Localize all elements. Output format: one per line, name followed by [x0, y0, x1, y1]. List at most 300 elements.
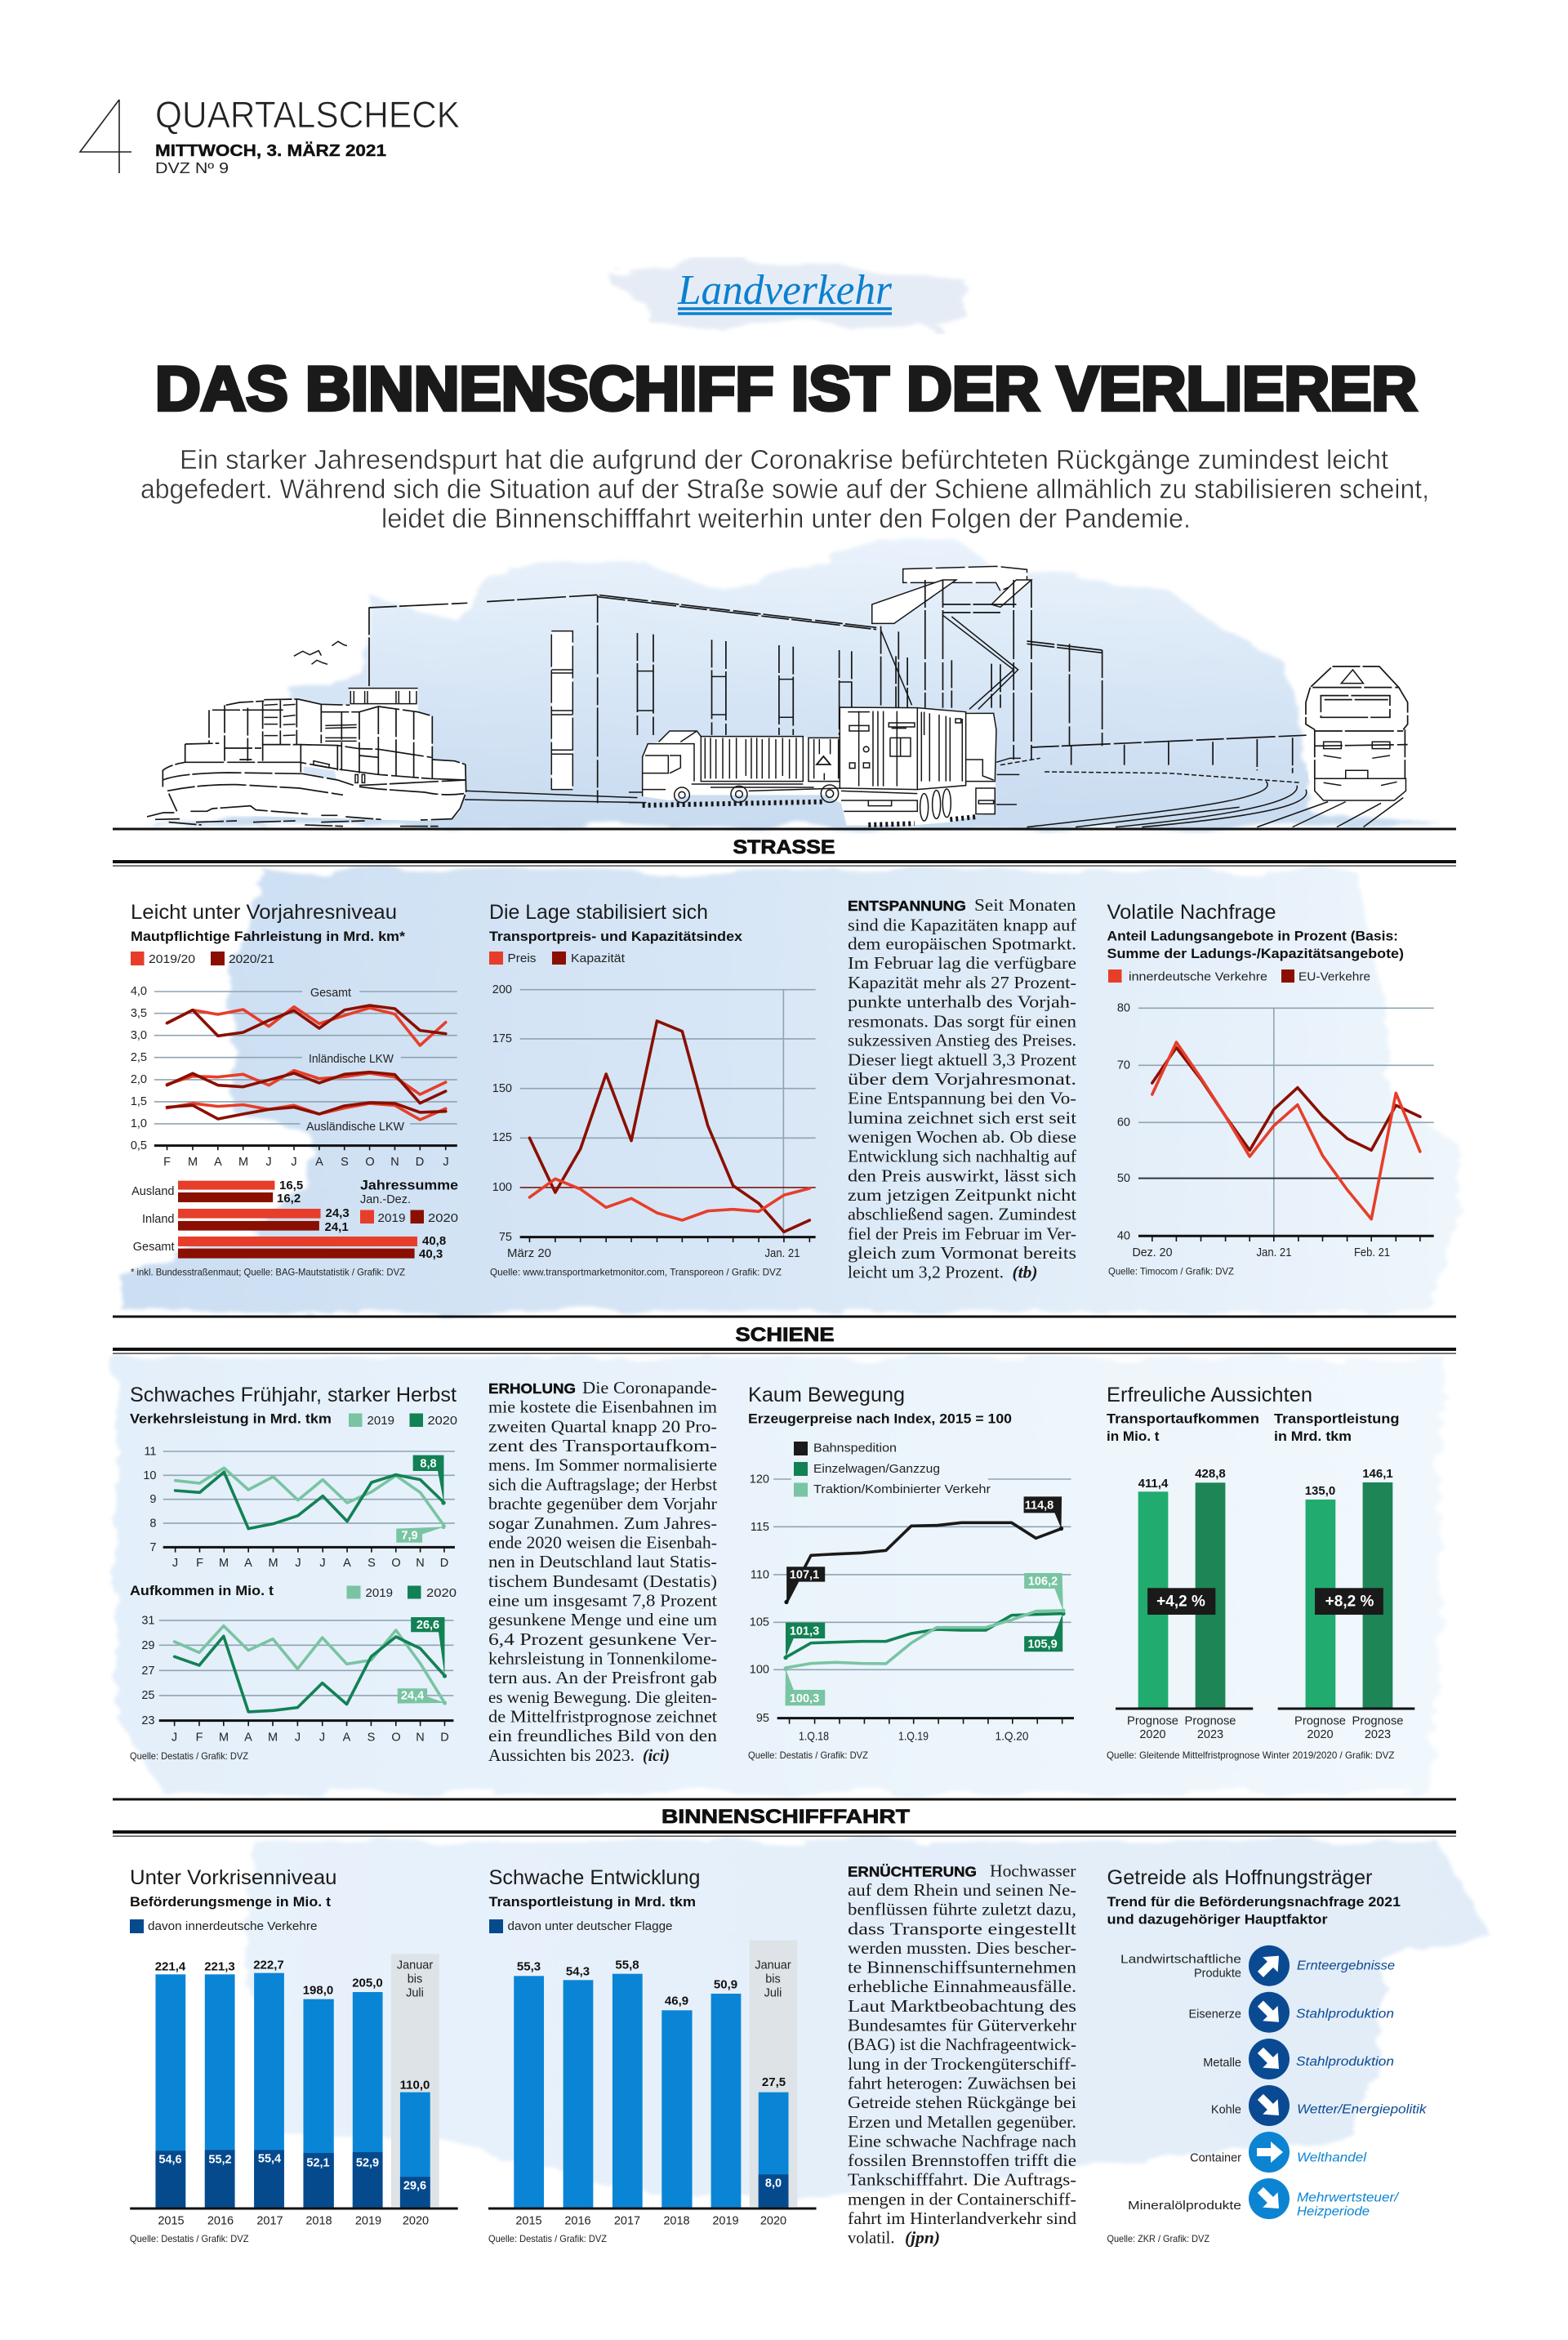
row: Kohle: Kohle [1211, 2104, 1241, 2117]
row: Eisenerze: Stahlproduktion [1296, 2008, 1394, 2021]
text block: Entspannung: Dieser liegt aktuell 3,3 Prozent [848, 1050, 1076, 1069]
subheading: Transportpreis- und Kapazitätsindex [489, 929, 743, 944]
text block: Erholung: ERHOLUNG [488, 1380, 576, 1397]
row: Container: Welthandel [1297, 2151, 1367, 2164]
line chart: truck kilometres: 4,0 [131, 985, 147, 998]
bar chart: tonnage: 2015 [158, 2215, 185, 2228]
line chart: traffic performance: M [219, 1557, 229, 1570]
bar chart: transport volume forecast: 2023 [1197, 1728, 1223, 1741]
subheading: Summe der Ladungs-/Kapazitätsangebote) [1107, 947, 1404, 961]
text block: Erholung: (ici) [643, 1745, 670, 1765]
source: Quelle: Destatis / Grafik: DVZ [488, 2233, 607, 2244]
text block: Entspannung: leicht um 3,2 Prozent. [848, 1263, 1004, 1282]
text block: Ernüchterung: fahrt im Hinterlandverkehr sind [848, 2209, 1077, 2228]
legend [794, 1442, 991, 1496]
bar chart: transport performance forecast: 2023 [1365, 1728, 1391, 1741]
row: Mineralölprodukte: Heizperiode [1297, 2205, 1370, 2218]
text block: Erholung: gesunkene Menge und eine um [488, 1610, 717, 1629]
legend: innerdeutsche Verkehre [1129, 970, 1267, 983]
bar chart: tonnage: 222,7 [253, 1959, 284, 1972]
legend: 2020 [426, 1587, 457, 1600]
subheading: Anteil Ladungsangebote in Prozent (Basis: [1107, 929, 1398, 944]
line chart: freight volume: O [391, 1732, 401, 1745]
line chart: freight volume: 23 [141, 1714, 155, 1727]
row: Container [1190, 2132, 1367, 2173]
legend [1108, 969, 1370, 983]
line chart: traffic performance: 7,9 [401, 1529, 418, 1542]
bar chart: transport performance: 46,9 [665, 1995, 688, 2008]
text block: Entspannung: dem europäischen Spotmarkt. [848, 934, 1076, 954]
text block: Entspannung: Im Februar lag die verfügbare [848, 953, 1076, 973]
line chart: traffic performance: J [319, 1557, 326, 1570]
bar chart: transport performance: 2019 [712, 2215, 739, 2228]
watercolor: road panel backdrop [118, 871, 1462, 1312]
legend: Preis [508, 952, 536, 965]
line chart: producer prices: 110 [751, 1568, 769, 1581]
birds [294, 641, 347, 664]
line chart: producer prices: 100,3 [790, 1692, 819, 1705]
line chart: share of load offers: 80 [1117, 1001, 1130, 1014]
line chart: freight volume: J [172, 1732, 177, 1745]
intro text [140, 444, 1429, 533]
subheading: Beförderungsmenge in Mio. t [130, 1895, 332, 1910]
line chart: traffic performance: N [416, 1557, 425, 1570]
date: MITTWOCH, 3. MÄRZ 2021 [155, 141, 386, 160]
text block: Erholung: kehrsleistung in Tonnenkilome- [488, 1648, 717, 1668]
section rules and heading: Binnenschifffahrt: BINNENSCHIFFFAHRT [662, 1806, 910, 1828]
heading: Die Lage stabilisiert sich [489, 901, 708, 924]
line chart: traffic performance: 9 [149, 1493, 157, 1506]
text block: Ernüchterung: erhebliche Einnahmeausfälle. [848, 1977, 1076, 1996]
masthead [80, 94, 460, 176]
line chart: producer prices: 101,3 [790, 1625, 819, 1638]
heading: Kaum Bewegung [748, 1384, 905, 1406]
row: Metalle: Metalle [1203, 2057, 1241, 2070]
text block: Erholung: ende 2020 weisen die Eisenbah- [488, 1532, 717, 1552]
source: Quelle: ZKR / Grafik: DVZ [1107, 2233, 1209, 2244]
bar chart: transport volume forecast: 428,8 [1195, 1467, 1226, 1481]
text block: Ernüchterung: auf dem Rhein und seinen Ne- [848, 1880, 1076, 1900]
line chart: freight volume: F [196, 1732, 203, 1745]
legend: 2019/20 [149, 953, 195, 966]
text block: Erholung: tern aus. An der Preisfront gab [488, 1668, 717, 1687]
line chart: truck kilometres: N [390, 1156, 399, 1169]
line chart: truck kilometres: Inländische LKW [309, 1053, 394, 1066]
panel: Kaum Bewegung [748, 1384, 1074, 1761]
line chart: producer prices: 1.Q.18 [799, 1730, 829, 1743]
legend: 2020/21 [229, 953, 274, 966]
line chart: share of load offers: Jan. 21 [1256, 1246, 1292, 1259]
text block: Ernüchterung: fossilen Brennstoffen trifft die [848, 2151, 1076, 2170]
bar chart: tonnage: 2016 [207, 2215, 234, 2228]
heading: Schwache Entwicklung [488, 1866, 701, 1889]
text block: Entspannung: gleich zum Vormonat bereits [848, 1243, 1076, 1263]
locomotive [1306, 666, 1408, 800]
text block: Erholung: sich die Auftragslage; der Herbst [488, 1474, 717, 1494]
bar chart: annual totals: 40,8 [422, 1234, 446, 1248]
legend: EU-Verkehre [1298, 970, 1370, 983]
subheading: Aufkommen in Mio. t [130, 1584, 274, 1598]
underline [678, 309, 892, 314]
bar chart: transport volume forecast: Prognose [1127, 1715, 1178, 1728]
legend: 2019 [368, 1415, 394, 1428]
text block: Ernüchterung: (jpn) [905, 2228, 940, 2248]
bar chart: tonnage: 205,0 [352, 1977, 383, 1990]
line chart: freight volume: A [244, 1732, 252, 1745]
line chart: share of load offers: Dez. 20 [1132, 1246, 1173, 1259]
line chart: price and capacity index: Jan. 21 [764, 1247, 800, 1260]
section rules and heading: Strasse: STRASSE [733, 836, 835, 858]
line chart: producer prices: 100 [750, 1663, 769, 1676]
text block: Erholung: 6,4 Prozent gesunkene Ver- [488, 1629, 717, 1649]
legend: davon unter deutscher Flagge [508, 1920, 673, 1933]
row: Mineralölprodukte: Mineralölprodukte [1128, 2200, 1241, 2213]
text block: Entspannung: sukzessiven Anstieg des Preises. [848, 1031, 1076, 1050]
panel: Die Lage stabilisiert sich [489, 901, 816, 1277]
legend: davon innerdeutsche Verkehre [148, 1920, 317, 1933]
heading: Erfreuliche Aussichten [1107, 1384, 1312, 1406]
line chart: producer prices: 1.Q.20 [995, 1730, 1029, 1743]
section rules and heading: Binnenschifffahrt [113, 1798, 1456, 1837]
subheading: Verkehrsleistung in Mrd. tkm [130, 1411, 332, 1426]
line chart: producer prices: 114,8 [1025, 1500, 1054, 1513]
text block: Erholung: sogar Zunahmen. Zum Jahres- [488, 1513, 717, 1533]
line chart: producer prices: 95 [756, 1712, 769, 1725]
text block: Entspannung: Kapazität mehr als 27 Prozent- [848, 973, 1076, 992]
line chart: truck kilometres: J [443, 1156, 449, 1169]
line chart: freight volume: D [440, 1732, 449, 1745]
line chart: freight volume: S [368, 1732, 375, 1745]
line chart: freight volume: M [268, 1732, 278, 1745]
bar chart: tonnage: 52,1 [306, 2156, 330, 2169]
text block: Ernüchterung: ERNÜCHTERUNG [848, 1863, 977, 1879]
title: DAS BINNENSCHIFF IST DER VERLIERER [155, 354, 1417, 424]
line chart: traffic performance: J [295, 1557, 301, 1570]
bar chart: annual totals: 40,3 [419, 1247, 443, 1261]
line chart: truck kilometres: M [238, 1156, 248, 1169]
line chart: price and capacity index: März 20 [507, 1247, 551, 1260]
intro text: Ein starker Jahresendspurt hat die aufgrund der Coronakrise befürchteten Rückgänge zumindest leicht [180, 444, 1388, 475]
line chart: price and capacity index: 125 [492, 1131, 512, 1144]
text block: Erholung: tischem Bundesamt (Destatis) [488, 1571, 717, 1591]
kicker Landverkehr: Landverkehr [677, 267, 893, 314]
text block: Erholung: zweiten Quartal knapp 20 Pro- [488, 1416, 717, 1436]
bar chart: annual totals: 2019 [377, 1212, 405, 1225]
line chart: traffic performance: S [368, 1557, 376, 1570]
line chart: share of load offers: 70 [1117, 1059, 1130, 1072]
bar chart: transport volume forecast: 411,4 [1138, 1477, 1169, 1491]
text block: Entspannung: Entwicklung sich nachhaltig auf [848, 1147, 1076, 1166]
text block: Erholung: zent des Transportaufkom- [488, 1436, 717, 1455]
line chart: price and capacity index: 75 [499, 1231, 512, 1244]
brush stroke [608, 261, 968, 331]
line chart: price and capacity index [492, 983, 816, 1260]
text block: Ernüchterung: mengen in der Containerschiff- [848, 2189, 1076, 2209]
text block: Erholung: brachte gegenüber dem Vorjahr [488, 1494, 717, 1513]
text block: Ernüchterung: Eine schwache Nachfrage nach [848, 2131, 1077, 2151]
line chart: traffic performance: 8 [149, 1518, 157, 1531]
source: * inkl. Bundesstraßenmaut; Quelle: BAG-Mautstatistik / Grafik: DVZ [131, 1266, 405, 1277]
line chart: share of load offers: 60 [1117, 1116, 1130, 1129]
text block: Entspannung: ENTSPANNUNG [848, 898, 966, 914]
illustration: port with ship, truck and train [147, 566, 1408, 827]
text block: Ernüchterung: te Binnenschiffsunternehmen [848, 1958, 1077, 1977]
text block: Erholung: nen in Deutschland laut Statis- [488, 1552, 717, 1571]
line chart: traffic performance [143, 1446, 455, 1570]
legend: Traktion/Kombinierter Verkehr [813, 1483, 991, 1496]
bar chart: tonnage: 55,2 [208, 2153, 232, 2166]
text block: Entspannung: sind die Kapazitäten knapp auf [848, 915, 1076, 934]
subheading [1107, 929, 1404, 961]
watercolor: illustration backdrop [141, 539, 1452, 827]
bar chart: transport performance forecast: +8,2 % [1325, 1593, 1374, 1611]
line chart: producer prices: 115 [751, 1521, 769, 1534]
panel: Unter Vorkrisenniveau [130, 1866, 458, 2244]
line chart: freight volume: M [219, 1732, 229, 1745]
text block: Ernüchterung: dass Transporte eingestellt [848, 1919, 1076, 1938]
line chart: freight volume: 27 [141, 1665, 155, 1678]
bar chart: transport performance: 2015 [515, 2215, 542, 2228]
row: Landwirtschaftliche Produkte: Ernteergebnisse [1297, 1959, 1395, 1973]
legend: Einzelwagen/Ganzzug [813, 1463, 940, 1476]
subheading: und dazugehöriger Hauptfaktor [1107, 1913, 1328, 1928]
row: Eisenerze [1189, 1992, 1394, 2033]
text block: Entspannung: Seit Monaten [974, 895, 1076, 915]
bar chart: transport performance: 2016 [564, 2215, 591, 2228]
line chart: traffic performance: O [391, 1557, 401, 1570]
bar chart: annual totals: 24,3 [325, 1206, 350, 1220]
bar chart: transport performance: 8,0 [765, 2177, 782, 2191]
section name: QUARTALSCHECK [155, 94, 460, 136]
line chart: traffic performance: F [196, 1557, 203, 1570]
heading: Getreide als Hoffnungsträger [1107, 1866, 1372, 1889]
row: Mineralölprodukte [1128, 2178, 1400, 2219]
section rules and heading: Schiene [113, 1315, 1456, 1354]
watercolor: inland waterway panel backdrop [245, 1841, 1490, 2197]
bar chart: tonnage: 55,4 [258, 2153, 281, 2166]
subheading: Transportleistung in Mrd. tkm [488, 1895, 696, 1910]
line chart: freight volume: 24,4 [401, 1689, 424, 1702]
bar chart: transport performance: 50,9 [714, 1978, 737, 1991]
legend: Bahnspedition [813, 1442, 897, 1455]
watercolor: rail panel backdrop [116, 1357, 1446, 1794]
panel: Leicht unter Vorjahresniveau [131, 901, 458, 1277]
text block: Erholung [488, 1378, 718, 1765]
text block: Erholung: ein freundliches Bild von den [488, 1726, 718, 1745]
line chart: freight volume: J [295, 1732, 301, 1745]
bar chart: annual totals [131, 1178, 458, 1261]
row: Container: Container [1190, 2151, 1241, 2164]
line chart: price and capacity index: 200 [492, 983, 512, 996]
line chart: share of load offers: 50 [1117, 1172, 1130, 1185]
bar chart: transport performance: Januar [755, 1959, 791, 1972]
line chart: share of load offers [1117, 1001, 1434, 1259]
heading: Schwaches Frühjahr, starker Herbst [130, 1384, 457, 1406]
line chart: freight volume: 29 [141, 1639, 155, 1652]
line chart: producer prices: 105,9 [1027, 1638, 1058, 1651]
line chart: freight volume: 31 [141, 1614, 155, 1627]
legend: 2020 [428, 1415, 457, 1428]
subheading: Trend für die Beförderungsnachfrage 2021 [1107, 1895, 1401, 1910]
line chart: truck kilometres: S [341, 1156, 349, 1169]
line chart: producer prices: 106,2 [1028, 1575, 1058, 1588]
bar chart: tonnage: 2019 [355, 2215, 381, 2228]
line chart: traffic performance: 11 [144, 1446, 157, 1459]
line chart: producer prices [750, 1473, 1074, 1743]
line chart: share of load offers: Feb. 21 [1354, 1246, 1390, 1259]
bar chart: transport performance forecast: 146,1 [1362, 1467, 1393, 1481]
line chart: freight volume: 26,6 [416, 1619, 439, 1632]
text block: Ernüchterung: volatil. [848, 2228, 895, 2248]
line chart: traffic performance: J [172, 1557, 178, 1570]
source: Quelle: Destatis / Grafik: DVZ [748, 1749, 868, 1761]
line chart: producer prices: 107,1 [790, 1568, 819, 1581]
text block: Entspannung [848, 895, 1077, 1282]
line chart: price and capacity index: 175 [492, 1032, 512, 1045]
text block: Entspannung: wenigen Wochen ab. Ob diese [848, 1127, 1076, 1147]
row: Landwirtschaftliche Produkte: Landwirtschaftliche [1120, 1954, 1241, 1967]
line chart: price and capacity index: 150 [492, 1082, 512, 1095]
text block: Ernüchterung: lung in der Trockengüterschiff- [848, 2054, 1076, 2074]
panel: Erfreuliche Aussichten [1107, 1384, 1414, 1761]
bar chart: tonnage: 221,4 [155, 1960, 186, 1973]
line chart: truck kilometres: 1,5 [131, 1095, 147, 1108]
text block: Ernüchterung: fahrt heterogen: Zuwächsen bei [848, 2073, 1076, 2093]
legend [349, 1413, 457, 1428]
bar chart: annual totals: Gesamt [133, 1241, 175, 1254]
line chart: truck kilometres: 2,0 [131, 1073, 147, 1086]
line chart: freight volume: A [343, 1732, 351, 1745]
line chart: producer prices: 1.Q.19 [898, 1730, 929, 1743]
legend: 2019 [366, 1587, 393, 1600]
line chart: truck kilometres [131, 985, 457, 1169]
line chart: freight volume: 25 [141, 1689, 155, 1702]
bar chart: transport performance: 55,8 [615, 1959, 639, 1972]
line chart: traffic performance: 8,8 [420, 1457, 437, 1470]
text block: Entspannung: lumina zeichnet sich erst seit [848, 1108, 1076, 1127]
subheading right: Transportleistung [1274, 1411, 1400, 1426]
legend [489, 952, 625, 965]
row: Eisenerze: Eisenerze [1189, 2008, 1241, 2021]
line chart: truck kilometres: J [291, 1156, 297, 1169]
line chart: truck kilometres: J [265, 1156, 272, 1169]
warehouse and crane [294, 566, 1403, 827]
text block: Ernüchterung: Getreide stehen Rückgänge bei [848, 2093, 1076, 2112]
subheading [1107, 1895, 1401, 1928]
row: Landwirtschaftliche Produkte: Produkte [1194, 1967, 1241, 1980]
row: Mineralölprodukte: Mehrwertsteuer/ [1297, 2191, 1400, 2205]
line chart: truck kilometres: 1,0 [131, 1117, 147, 1130]
intro text: abgefedert. Während sich die Situation auf der Straße sowie auf der Schiene allmählich zu stabilisieren scheint, [140, 474, 1429, 504]
section rules and heading: Schiene: SCHIENE [735, 1324, 835, 1346]
bar chart: transport performance [488, 1941, 816, 2228]
source: Quelle: Destatis / Grafik: DVZ [130, 2233, 248, 2244]
bar chart: transport volume forecast [1116, 1467, 1253, 1741]
legend [346, 1586, 457, 1600]
line chart: freight volume: N [416, 1732, 425, 1745]
bar chart: transport performance: 2017 [614, 2215, 640, 2228]
subheading: Mautpflichtige Fahrleistung in Mrd. km* [131, 929, 406, 944]
text block: Entspannung: punkte unterhalb des Vorjah- [848, 992, 1076, 1012]
text block: Entspannung: fiel der Preis im Februar im Ver- [848, 1223, 1076, 1243]
text block: Ernüchterung: werden mussten. Dies bescher- [848, 1938, 1076, 1958]
line chart: truck kilometres: A [315, 1156, 323, 1169]
subheading left: Transportaufkommen [1107, 1411, 1259, 1426]
line chart: truck kilometres: 0,5 [131, 1139, 147, 1152]
panel: Getreide als Hoffnungsträger [1107, 1866, 1428, 2244]
crane [903, 566, 1027, 591]
bar chart: transport performance forecast: Prognose [1294, 1715, 1346, 1728]
text block: Erholung: mie kostete die Eisenbahnen im [488, 1397, 717, 1417]
page number 4 [80, 100, 131, 173]
text block: Entspannung: über dem Vorjahresmonat. [848, 1069, 1076, 1089]
source: Quelle: www.transportmarketmonitor.com, Transporeon / Grafik: DVZ [490, 1266, 782, 1277]
row: Metalle [1203, 2039, 1394, 2079]
line chart: truck kilometres: O [365, 1156, 375, 1169]
bar chart: transport volume forecast: +4,2 % [1156, 1593, 1205, 1611]
kicker Landverkehr [608, 261, 968, 331]
line chart: producer prices: 105 [750, 1616, 769, 1629]
bar chart: tonnage: 2017 [256, 2215, 283, 2228]
bar chart: transport performance: bis [765, 1973, 781, 1986]
bar chart: transport performance forecast: Prognose [1352, 1715, 1403, 1728]
subheading left [1107, 1411, 1259, 1444]
text block: Entspannung: zum jetzigen Zeitpunkt nicht [848, 1185, 1076, 1205]
line chart: truck kilometres: D [416, 1156, 424, 1169]
source: Quelle: Destatis / Grafik: DVZ [130, 1750, 248, 1762]
row: Kohle: Wetter/Energiepolitik [1297, 2102, 1428, 2117]
text block: Ernüchterung: Tankschifffahrt. Die Auftrags- [848, 2170, 1076, 2190]
line chart: producer prices: 120 [750, 1473, 769, 1486]
text block: Entspannung: abschließend sagen. Zumindest [848, 1205, 1076, 1224]
truck and swap container [629, 707, 1021, 826]
text block: Entspannung: resmonats. Das sorgt für einen [848, 1011, 1077, 1031]
text block: Ernüchterung [848, 1861, 1077, 2248]
bar chart: tonnage: 29,6 [403, 2179, 426, 2192]
bar chart: transport performance: 55,3 [517, 1960, 541, 1973]
intro text: leidet die Binnenschifffahrt weiterhin unter den Folgen der Pandemie. [381, 503, 1191, 533]
subheading: Erzeugerpreise nach Index, 2015 = 100 [748, 1411, 1012, 1426]
bar chart: annual totals: Inland [142, 1213, 175, 1226]
line chart: traffic performance: A [343, 1557, 351, 1570]
line chart: truck kilometres: A [214, 1156, 222, 1169]
text block: Erholung: eine um insgesamt 7,8 Prozent [488, 1591, 717, 1611]
text block: Erholung: mens. Im Sommer normalisierte [488, 1455, 717, 1475]
bar chart: tonnage: Juli [406, 1986, 424, 1999]
line chart: truck kilometres: 2,5 [131, 1051, 147, 1064]
bar chart: tonnage [130, 1954, 458, 2228]
bar chart: annual totals: Jan.-Dez. [360, 1193, 411, 1206]
bar chart: transport performance: 27,5 [762, 2075, 786, 2089]
subheading left: in Mio. t [1107, 1429, 1160, 1444]
text block: Entspannung: (tb) [1013, 1263, 1037, 1282]
line chart: traffic performance: 7 [149, 1541, 157, 1554]
text block: Ernüchterung: Bundesamtes für Güterverkehr [848, 2016, 1076, 2035]
container ship [147, 688, 466, 827]
text block: Ernüchterung: benflüssen führte zuletzt dazu, [848, 1900, 1076, 1919]
line chart: freight volume [141, 1614, 453, 1745]
row: Metalle: Stahlproduktion [1296, 2055, 1394, 2069]
line chart: traffic performance: M [268, 1557, 278, 1570]
subheading right: in Mrd. tkm [1274, 1429, 1352, 1444]
line chart: truck kilometres: M [188, 1156, 198, 1169]
text block: Erholung: de Mittelfristprognose zeichnet [488, 1707, 717, 1727]
bar chart: transport performance forecast: 2020 [1307, 1728, 1334, 1741]
line chart: traffic performance: A [244, 1557, 252, 1570]
issue number: DVZ Nº 9 [155, 160, 229, 176]
row: Landwirtschaftliche Produkte [1120, 1946, 1395, 1986]
source: Quelle: Timocom / Grafik: DVZ [1108, 1266, 1234, 1277]
